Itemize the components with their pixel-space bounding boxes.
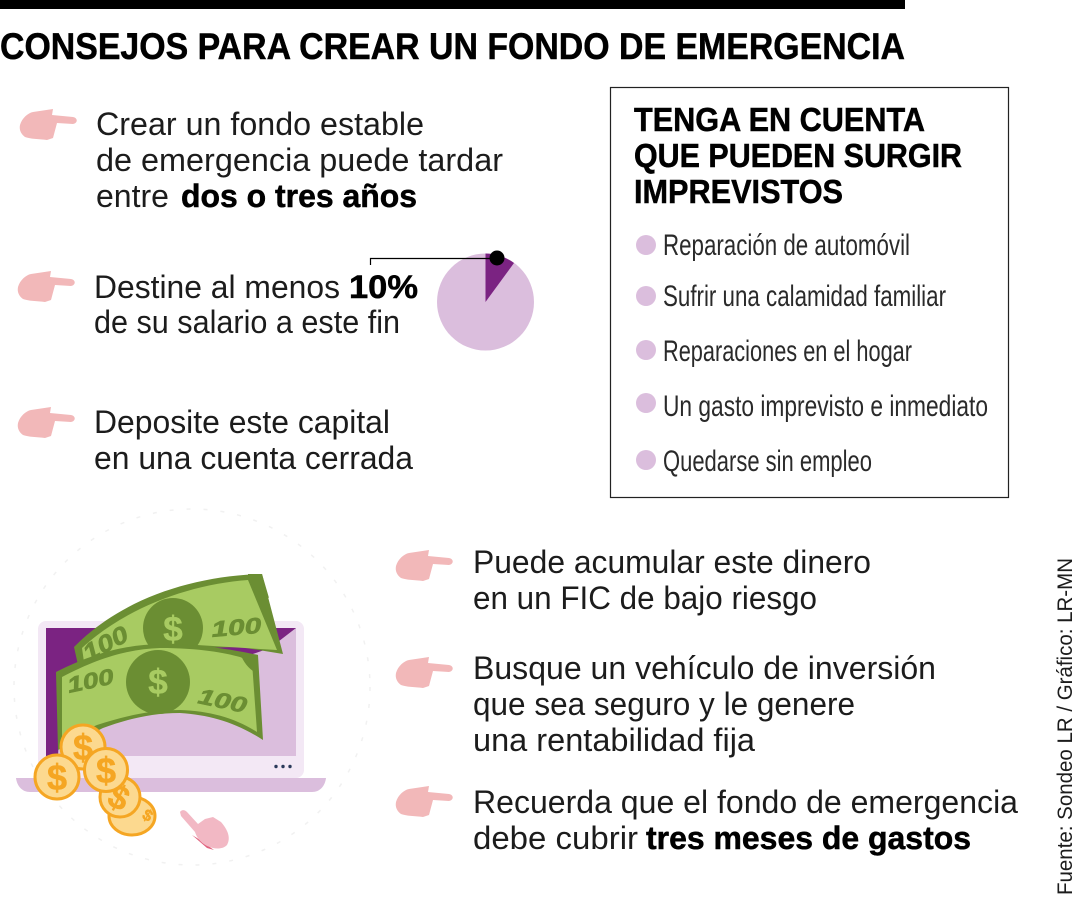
gold coins: $ <box>47 757 67 798</box>
gold coins: $ <box>96 750 116 791</box>
banknote back: 100 <box>78 621 134 667</box>
laptop base <box>16 778 326 792</box>
gold coins: $ <box>102 777 135 819</box>
tip 5 text: Busque un vehículo de inversión <box>473 650 936 686</box>
tip 1 text: dos o tres años <box>181 178 417 214</box>
panel heading: QUE PUEDEN SURGIR <box>634 137 962 174</box>
top rule <box>0 0 905 9</box>
tip 6 text: tres meses de gastos <box>646 820 971 856</box>
icon: pointing hand 5 <box>396 657 453 688</box>
pie slice: 10% <box>486 254 514 302</box>
panel: unforeseen events <box>610 88 1008 498</box>
laptop body <box>38 621 304 778</box>
leader line <box>370 258 497 265</box>
banknote front: 100 <box>65 663 117 698</box>
list item 3 <box>636 335 912 368</box>
list item 4: Un gasto imprevisto e inmediato <box>663 390 988 423</box>
gold coins <box>35 725 155 835</box>
tip 3 text: en una cuenta cerrada <box>94 440 413 476</box>
laptop dots <box>274 765 292 768</box>
icon: pointing hand 1 <box>20 109 77 140</box>
leader dot <box>490 250 504 266</box>
list item 2 <box>636 280 946 313</box>
tip 3 text: Deposite este capital <box>94 404 390 440</box>
banknote back: $ <box>163 610 183 649</box>
list item 1: Reparación de automóvil <box>663 229 910 262</box>
tip 6 text: Recuerda que el fondo de emergencia <box>473 784 1018 820</box>
tip 1 text: de emergencia puede tardar <box>96 142 503 178</box>
icon: pointing hand 2 <box>18 271 75 302</box>
tip 4 text: en un FIC de bajo riesgo <box>473 580 817 616</box>
banknote front: $ <box>148 663 168 702</box>
tip 3: closed account <box>18 404 413 476</box>
tip 4 text: Puede acumular este dinero <box>473 544 871 580</box>
banknote back <box>74 574 283 667</box>
list item 2: Sufrir una calamidad familiar <box>663 280 946 313</box>
tip 5 text: que sea seguro y le genere <box>473 686 855 722</box>
tip 1 text: entre <box>96 178 169 214</box>
list item 1 <box>636 229 910 262</box>
banknote front: 100 <box>196 683 250 718</box>
dotted background circle <box>14 509 370 865</box>
list item 5 <box>636 445 872 478</box>
tip 2 text: Destine al menos <box>94 269 340 305</box>
tip 5: investment vehicle <box>396 650 936 758</box>
tip 6: three months <box>396 784 1018 856</box>
tip 5 text: una rentabilidad fija <box>473 722 755 758</box>
gold coins: $ <box>73 727 93 768</box>
icon: pointing hand 6 <box>396 786 453 817</box>
panel heading: TENGA EN CUENTA <box>634 101 925 138</box>
tip 4: low risk FIC <box>396 544 871 616</box>
icon: pointing hand 3 <box>18 407 75 438</box>
list item 5: Quedarse sin empleo <box>663 445 872 478</box>
tip 2 text: de su salario a este fin <box>94 304 400 340</box>
source credit: Fuente: Sondeo LR / Gráfico: LR-MN <box>1054 558 1077 895</box>
icon: pointing hand 4 <box>396 550 453 581</box>
banknote back: 100 <box>210 613 263 642</box>
panel heading: IMPREVISTOS <box>634 173 843 210</box>
illustration: laptop with money <box>14 509 370 865</box>
tip 1 text: Crear un fondo estable <box>96 106 424 142</box>
tip 2: ten percent <box>18 269 418 340</box>
gold coins: $ <box>139 807 155 826</box>
tip 6 text: debe cubrir <box>473 820 638 856</box>
cursor hand <box>180 810 229 850</box>
title: CONSEJOS PARA CREAR UN FONDO DE EMERGENCIA <box>0 26 905 67</box>
pie chart: 10 percent <box>370 250 534 350</box>
laptop screen <box>46 628 296 756</box>
list item 3: Reparaciones en el hogar <box>663 335 912 368</box>
tip 1: stable fund <box>20 106 503 214</box>
tip 2 text: 10% <box>349 269 418 305</box>
banknote front <box>56 644 263 750</box>
